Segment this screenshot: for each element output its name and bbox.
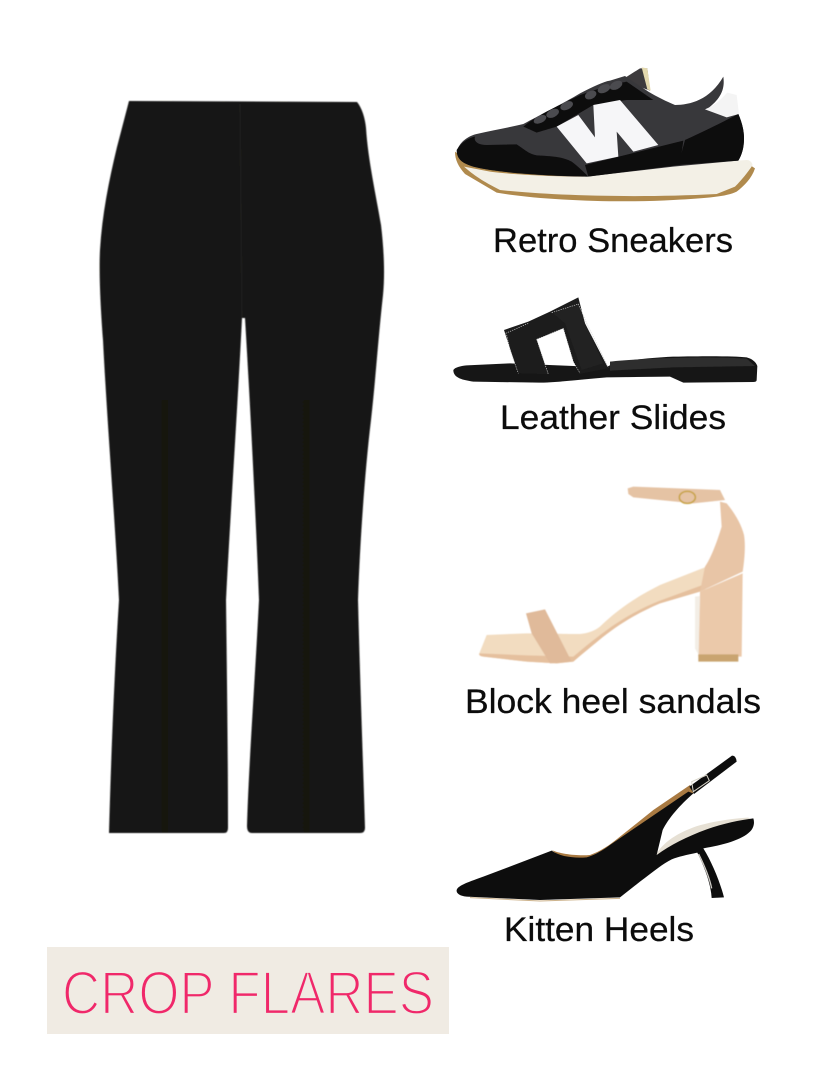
sandal heel tip	[698, 654, 738, 662]
sandal footbed edge	[479, 585, 703, 663]
kitten heel silver inner	[699, 854, 712, 888]
sneaker heel collar	[705, 93, 739, 117]
sandal heel counter	[700, 502, 745, 592]
title: CROP FLARES	[62, 959, 434, 1027]
icon: retro sneaker	[455, 67, 755, 201]
sneaker upper	[457, 76, 744, 177]
sandal toe strap	[526, 609, 572, 663]
pants: soft crease shading	[135, 104, 312, 832]
label: Block heel sandals: Block heel sandals	[465, 683, 761, 721]
slide stitching	[506, 304, 608, 374]
kitten heel tan lining	[552, 785, 693, 858]
kitten heel black upper and heel	[457, 792, 754, 900]
slide H strap	[504, 297, 608, 374]
sneaker white N logo	[557, 100, 658, 163]
kitten heel sole line	[470, 898, 620, 901]
pants: black crop flares	[100, 101, 384, 833]
label: Kitten Heels: Kitten Heels	[504, 911, 694, 949]
label: Retro Sneakers: Retro Sneakers	[493, 222, 733, 260]
sandal footbed	[479, 563, 715, 663]
slide strap shine	[553, 303, 603, 370]
sneaker eyestay	[523, 82, 653, 133]
sneaker midsole	[464, 160, 753, 196]
icon: leather slide	[453, 297, 757, 383]
sandal gold buckle	[679, 491, 695, 503]
sandal ankle strap	[628, 487, 725, 503]
sneaker black heel	[678, 114, 744, 165]
sneaker black side bar	[585, 141, 683, 177]
sneaker tongue	[622, 68, 650, 91]
label: Leather Slides: Leather Slides	[500, 399, 726, 437]
icon: kitten heel slingback	[457, 756, 754, 901]
kitten heel buckle	[692, 775, 709, 792]
icon: block heel sandal	[479, 487, 745, 663]
kitten heel strap	[689, 756, 737, 794]
sneaker laces	[532, 79, 624, 125]
sandal block heel	[698, 573, 743, 657]
sneaker black suede toe	[457, 137, 588, 177]
sneaker outsole	[455, 152, 755, 201]
kitten heel insole	[657, 818, 752, 856]
slide sole	[453, 356, 757, 383]
title panel: CROP FLARES	[47, 947, 449, 1034]
